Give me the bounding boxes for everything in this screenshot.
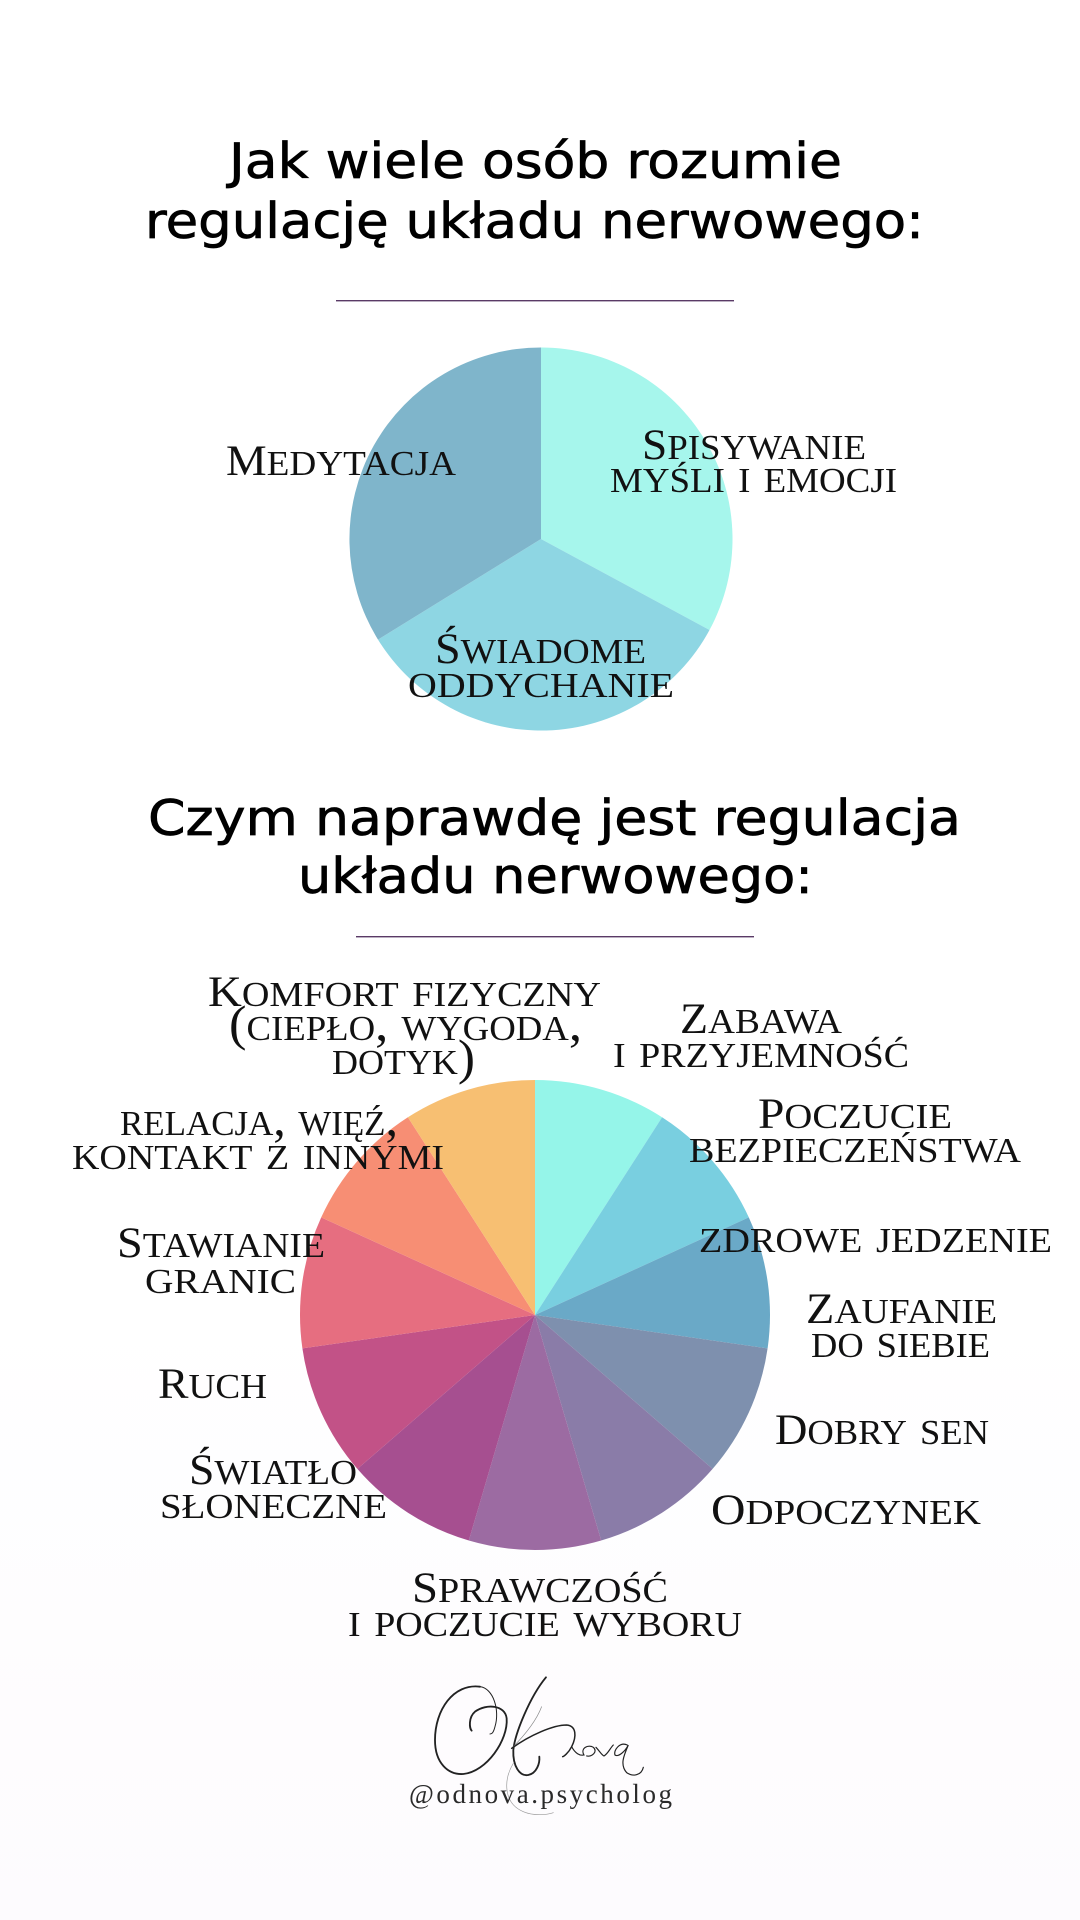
- label: Sprawczość i poczucie wyboru: Sprawczość: [412, 1557, 668, 1613]
- logo: Odnova signature: [435, 1677, 643, 1815]
- handle: @odnova.psycholog: @odnova.psycholog: [409, 1779, 672, 1809]
- label: Spisywanie myśli i emocji: Spisywanie: [642, 414, 866, 470]
- title: first heading: [145, 133, 924, 250]
- label: Komfort fizyczny: [208, 961, 601, 1085]
- label: Komfort fizyczny: Komfort fizyczny: [208, 961, 601, 1017]
- label: Poczucie bezpieczeństwa: [689, 1083, 1022, 1173]
- label: Dobry sen: Dobry sen: [775, 1399, 989, 1455]
- label: Światło słoneczne: [160, 1439, 387, 1529]
- label: Poczucie bezpieczeństwa: bezpieczeństwa: [689, 1117, 1022, 1173]
- pie chart: eleven regulation factors: [300, 1080, 770, 1550]
- label: relacja, więź, kontakt z innymi: [72, 1090, 444, 1180]
- title: first heading: Jak wiele osób rozumie: [226, 133, 842, 190]
- label: Świadome oddychanie: [408, 618, 674, 708]
- label: relacja, więź, kontakt z innymi: relacja, więź,: [120, 1090, 398, 1146]
- label: Sprawczość i poczucie wyboru: [348, 1557, 742, 1647]
- label: Komfort fizyczny: dotyk): [332, 1029, 475, 1085]
- label: Zaufanie do siebie: do siebie: [811, 1312, 990, 1368]
- label: Zabawa i przyjemność: Zabawa: [680, 988, 843, 1044]
- pie chart: three common methods: [349, 348, 733, 731]
- title: second heading: układu nerwowego:: [298, 848, 813, 905]
- label: zdrowe jedzenie: zdrowe jedzenie: [699, 1207, 1052, 1263]
- label: Zabawa i przyjemność: [613, 988, 909, 1078]
- label: Ruch: Ruch: [158, 1353, 267, 1409]
- label: relacja, więź, kontakt z innymi: kontakt z innymi: [72, 1124, 444, 1180]
- label: Światło słoneczne: słoneczne: [160, 1473, 387, 1529]
- label: Stawianie granic: [117, 1212, 325, 1304]
- title: second heading: Czym naprawdę jest regulacja: [148, 790, 961, 847]
- label: Zaufanie do siebie: [806, 1278, 997, 1368]
- label: Zabawa i przyjemność: i przyjemność: [613, 1022, 909, 1078]
- label: Zaufanie do siebie: Zaufanie: [806, 1278, 997, 1334]
- label: Światło słoneczne: Światło: [189, 1439, 357, 1495]
- label: Komfort fizyczny: (ciepło, wygoda,: [229, 995, 582, 1051]
- label: Poczucie bezpieczeństwa: Poczucie: [758, 1083, 952, 1139]
- label: Świadome oddychanie: Świadome: [435, 618, 646, 674]
- label: Stawianie granic: Stawianie: [117, 1212, 325, 1268]
- label: Spisywanie myśli i emocji: myśli i emocji: [610, 447, 897, 503]
- label: Sprawczość i poczucie wyboru: i poczucie wyboru: [348, 1591, 742, 1647]
- label: Medytacja: Medytacja: [226, 430, 457, 486]
- label: Odpoczynek: Odpoczynek: [711, 1479, 981, 1535]
- label: Spisywanie myśli i emocji: [610, 414, 897, 503]
- label: Świadome oddychanie: oddychanie: [408, 652, 674, 708]
- label: Stawianie granic: granic: [145, 1248, 296, 1304]
- title: second heading: [148, 790, 961, 905]
- title: first heading: regulację układu nerwowego:: [145, 193, 924, 250]
